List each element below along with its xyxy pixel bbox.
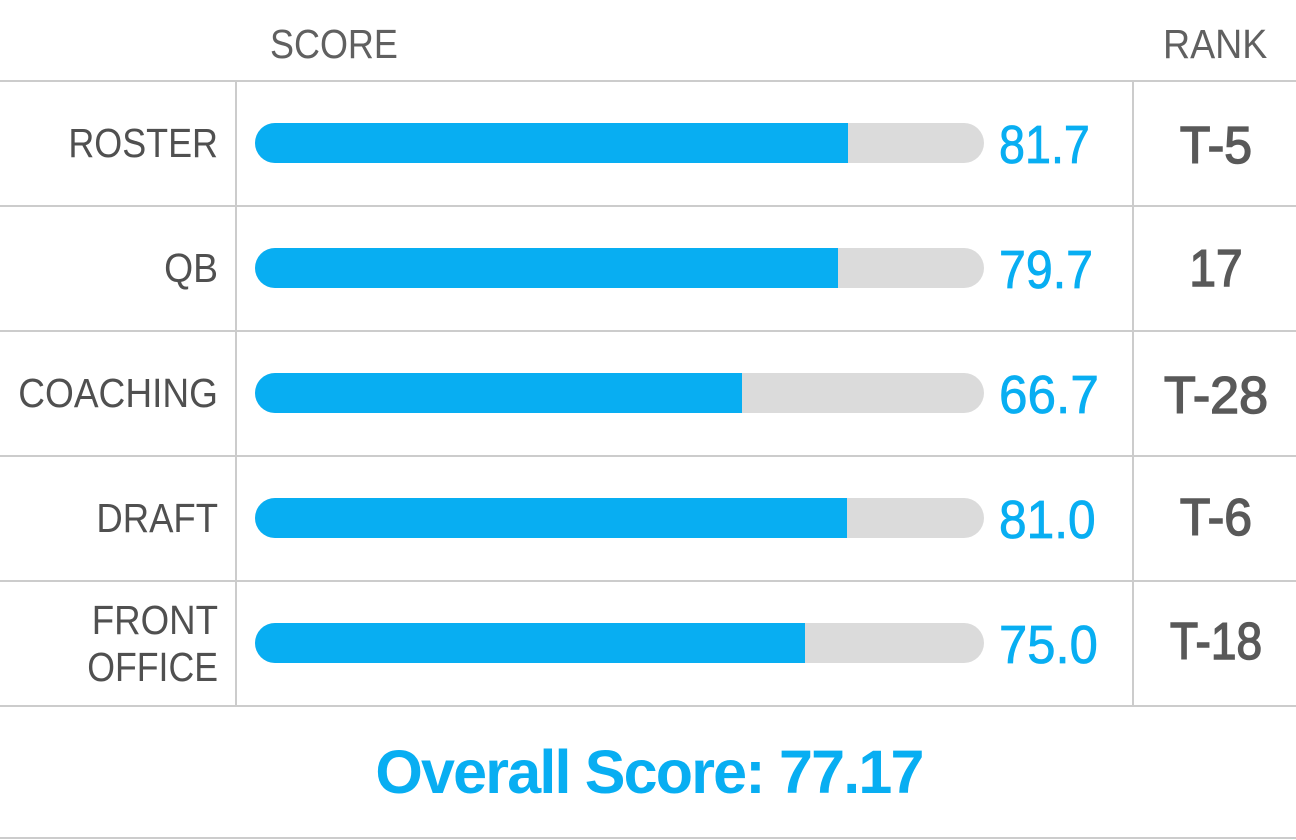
bar: draft 81.0 — [255, 498, 984, 538]
column heading: rank: RANK — [1163, 21, 1267, 67]
value: roster: 81.7 — [999, 115, 1090, 175]
label: qb: QB — [164, 245, 218, 291]
row: coaching — [18, 365, 1268, 425]
value: qb: 79.7 — [999, 240, 1093, 300]
row: qb — [164, 240, 1243, 300]
rank: roster: T-5 — [1180, 117, 1252, 175]
rank: qb: 17 — [1189, 240, 1243, 298]
value: coaching: 66.7 — [999, 365, 1099, 425]
label: front office: FRONT — [92, 597, 218, 643]
rank: front office: T-18 — [1170, 613, 1262, 671]
rank: draft: T-6 — [1180, 489, 1252, 547]
bar: front office 75.0 — [255, 623, 984, 663]
column heading: score: SCORE — [270, 21, 398, 67]
overall score: Overall Score: 77.17 — [375, 738, 923, 806]
bar: qb 79.7 — [255, 248, 984, 288]
value: front office: 75.0 — [999, 615, 1098, 675]
rank: coaching: T-28 — [1164, 367, 1268, 425]
row: front office — [87, 597, 1262, 690]
row: roster — [68, 115, 1252, 175]
value: draft: 81.0 — [999, 490, 1096, 550]
bar: coaching 66.7 — [255, 373, 984, 413]
label: front office — [87, 597, 218, 690]
label: roster: ROSTER — [68, 120, 218, 166]
label: coaching: COACHING — [18, 370, 218, 416]
label: front office: OFFICE — [87, 644, 218, 690]
row: draft — [96, 489, 1252, 550]
label: draft: DRAFT — [96, 495, 218, 541]
bar: roster 81.7 — [255, 123, 984, 163]
